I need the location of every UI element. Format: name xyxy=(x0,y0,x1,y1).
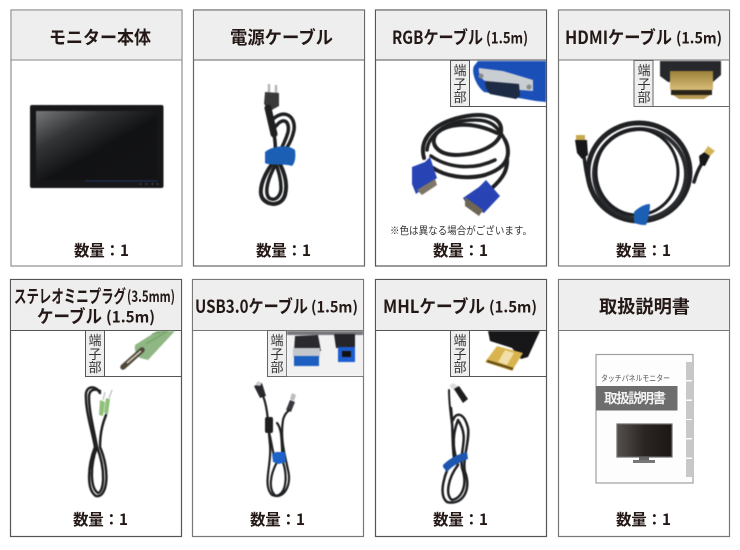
terminal inset: HDMI: 端 xyxy=(637,60,651,79)
heading: monitor: モニター本体 xyxy=(49,24,151,50)
heading: stereo mini plug cable: ステレオミニプラグ xyxy=(14,283,126,309)
panel: power cable xyxy=(194,10,364,266)
heading: stereo mini plug cable xyxy=(10,280,182,330)
panel: USB 3.0 cable xyxy=(192,280,364,536)
quantity: 数量：1 xyxy=(616,508,671,530)
terminal inset: USB xyxy=(268,330,363,376)
panel: stereo mini plug cable xyxy=(10,280,182,536)
quantity: 数量：1 xyxy=(73,508,128,530)
terminal inset: MHL: 子 xyxy=(453,344,467,363)
terminal inset: USB: 端 xyxy=(270,330,284,349)
quantity: 数量：1 xyxy=(433,508,488,530)
terminal inset: HDMI: 部 xyxy=(637,87,651,106)
panel: MHL cable xyxy=(376,280,546,536)
terminal inset: HDMI: 子 xyxy=(637,74,651,93)
heading: power cable: 電源ケーブル xyxy=(230,24,333,50)
icon: manual booklet xyxy=(596,354,693,483)
terminal inset: MHL xyxy=(450,330,546,376)
quantity: 数量：1 xyxy=(256,239,311,261)
heading: stereo mini plug cable: ケーブル xyxy=(37,303,102,329)
heading: power cable xyxy=(194,10,364,60)
icon: stereo cable photo xyxy=(86,387,112,496)
heading: RGB cable xyxy=(376,10,546,60)
heading: stereo mini plug cable: (3.5mm) xyxy=(127,285,175,307)
panel: monitor xyxy=(11,10,182,266)
heading: USB 3.0 cable: USB3.0ケーブル xyxy=(195,293,308,319)
quantity: 数量：1 xyxy=(74,239,129,261)
heading: HDMI cable: HDMIケーブル xyxy=(565,24,672,50)
heading: RGB cable: (1.5m) xyxy=(486,26,528,48)
icon: RGB cable photo xyxy=(412,115,508,216)
note: ※色は異なる場合がございます。 xyxy=(390,224,532,237)
quantity: 数量：1 xyxy=(250,508,305,530)
panel: manual xyxy=(558,280,730,536)
terminal inset: VGA: 端 xyxy=(453,60,467,79)
terminal inset: VGA xyxy=(450,60,546,106)
icon: manual booklet: 取扱説明書 xyxy=(604,390,666,406)
panel: HDMI cable xyxy=(558,10,730,266)
heading: MHL cable: (1.5m) xyxy=(489,296,537,318)
heading: stereo mini plug cable: (1.5m) xyxy=(106,306,155,328)
terminal inset: USB: 子 xyxy=(270,344,284,363)
heading: USB 3.0 cable: (1.5m) xyxy=(311,296,358,318)
heading: manual xyxy=(558,280,730,330)
heading: MHL cable: MHLケーブル xyxy=(383,293,485,319)
heading: manual: 取扱説明書 xyxy=(599,293,690,319)
heading: MHL cable xyxy=(376,280,546,330)
icon: manual booklet: タッチパネルモニター xyxy=(601,374,670,383)
terminal inset: HDMI xyxy=(634,60,729,106)
icon: power cable photo xyxy=(261,84,295,204)
quantity: 数量：1 xyxy=(433,239,488,261)
heading: USB 3.0 cable xyxy=(192,280,364,330)
icon: monitor photo xyxy=(30,105,164,188)
heading: RGB cable: RGBケーブル xyxy=(392,24,483,50)
terminal inset: stereo plug: 端 xyxy=(88,330,102,349)
icon: HDMI cable photo xyxy=(575,123,715,225)
heading: HDMI cable: (1.5m) xyxy=(676,26,722,48)
terminal inset: MHL: 端 xyxy=(453,330,467,349)
terminal inset: stereo plug xyxy=(86,330,181,376)
terminal inset: USB: 部 xyxy=(270,357,284,376)
quantity: 数量：1 xyxy=(616,239,671,261)
terminal inset: stereo plug: 子 xyxy=(88,344,102,363)
panel: RGB cable xyxy=(376,10,546,266)
heading: monitor xyxy=(11,10,182,60)
terminal inset: MHL: 部 xyxy=(453,357,467,376)
icon: MHL cable photo xyxy=(443,383,468,503)
icon: USB cable photo xyxy=(254,381,296,496)
heading: HDMI cable xyxy=(558,10,730,60)
terminal inset: VGA: 部 xyxy=(453,87,467,106)
terminal inset: stereo plug: 部 xyxy=(88,357,102,376)
terminal inset: VGA: 子 xyxy=(453,74,467,93)
